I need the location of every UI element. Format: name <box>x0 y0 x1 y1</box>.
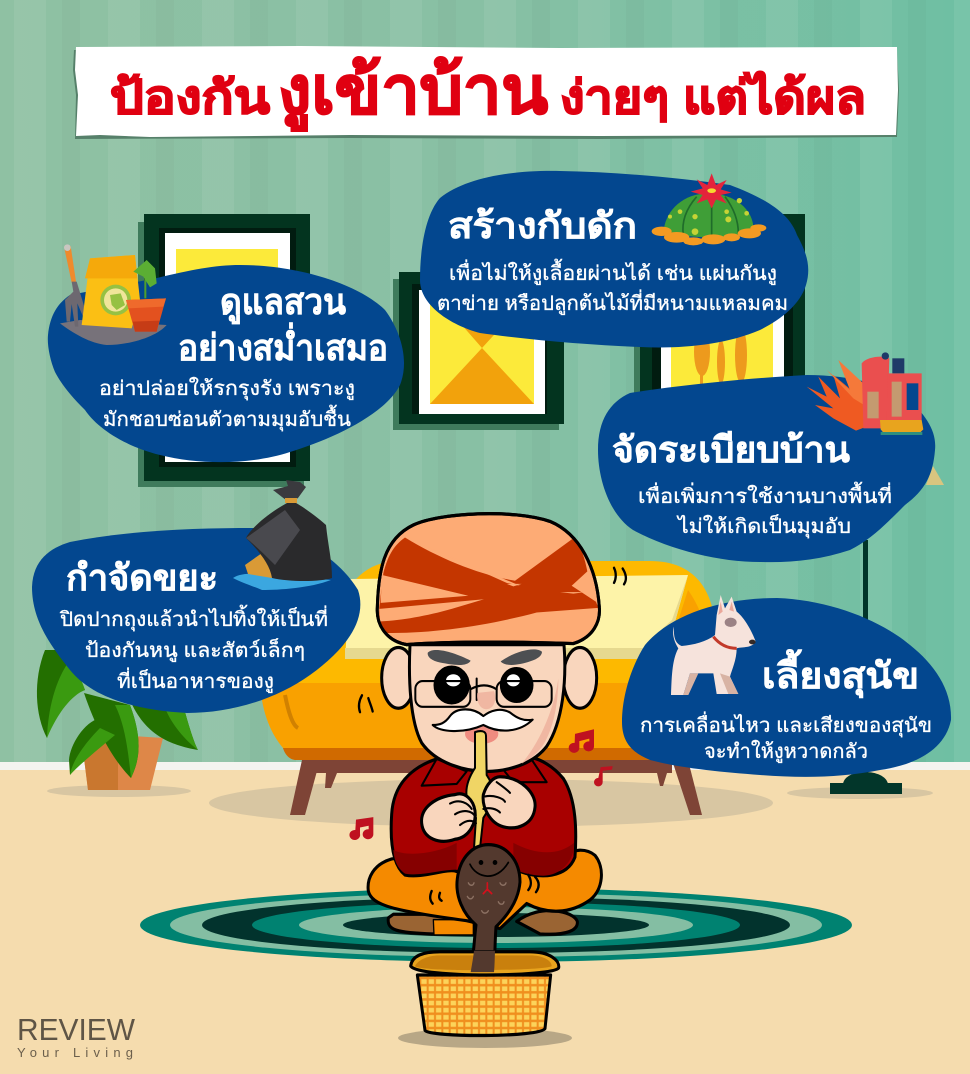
blob: garden <box>48 265 404 462</box>
basket <box>411 951 559 1036</box>
text: tidy house: เพื่อเพิ่มการใช้งานบางพื้นที่ <box>638 482 892 508</box>
snake charmer <box>349 514 626 1036</box>
text: garbage: ป้องกันหนู และสัตว์เล็กๆ <box>85 637 305 663</box>
floor and baseboard <box>0 762 970 1074</box>
eyebrows <box>428 649 542 665</box>
ears <box>382 647 597 708</box>
eyes <box>435 667 532 703</box>
logo: Your Living <box>17 1045 133 1060</box>
picture frame left <box>138 214 310 487</box>
icon: garden tools and plant <box>60 244 167 345</box>
text: trap: สร้างกับดัก <box>448 205 637 246</box>
jacket shading <box>393 843 574 876</box>
icon: cactus <box>652 173 766 245</box>
face <box>409 645 565 771</box>
sofa <box>260 561 716 815</box>
text: garden: ดูแลสวน <box>220 281 346 325</box>
text: garbage <box>60 557 328 694</box>
title text <box>110 53 866 132</box>
music notes <box>349 729 613 840</box>
turban <box>377 514 599 645</box>
red jacket <box>391 757 576 876</box>
mouth <box>465 724 498 744</box>
text: tidy house: จัดระเบียบบ้าน <box>612 429 850 470</box>
icon: garbage bag <box>233 480 332 590</box>
logo: REVIEW <box>17 1012 136 1047</box>
text: dog: เลี้ยงสุนัข <box>762 649 919 699</box>
text: garden <box>99 281 388 432</box>
text: dog: จะทำให้งูหวาดกลัว <box>704 740 868 764</box>
text: dog: การเคลื่อนไหว และเสียงของสุนัข <box>640 711 932 738</box>
text: garbage: ที่เป็นอาหารของงู <box>117 667 274 694</box>
picture frame right <box>634 214 805 402</box>
text: garden: อย่างสม่ำเสมอ <box>178 322 388 368</box>
title text: ง่ายๆ แต่ได้ผล <box>560 71 866 123</box>
cobra snake <box>457 845 520 972</box>
glasses <box>415 679 552 707</box>
shake marks <box>359 568 626 904</box>
text: tidy house: ไม่ให้เกิดเป็นมุมอับ <box>676 513 851 539</box>
text: trap: ตาข่าย หรือปลูกต้นไม้ที่มีหนามแหลมคม <box>437 289 788 316</box>
basket shadow <box>398 1028 572 1048</box>
legs and shoes <box>368 850 601 935</box>
wall background <box>0 0 970 764</box>
floor lamp <box>830 466 944 794</box>
picture frame middle <box>393 272 564 430</box>
blob: garbage <box>32 528 360 713</box>
floor shadows <box>47 779 933 827</box>
title text: งูเข้าบ้าน <box>278 53 548 132</box>
text: tidy house <box>612 429 892 539</box>
blob: tidy house <box>598 375 935 562</box>
title banner <box>73 46 899 139</box>
text: garden: มักชอบซ่อนตัวตามมุมอับชื้น <box>103 405 351 432</box>
blob: dog <box>622 598 951 777</box>
hands and flute <box>422 731 535 848</box>
nose <box>477 691 495 709</box>
potted plant <box>37 650 198 790</box>
cheek shade <box>522 679 558 764</box>
text: dog <box>640 649 932 764</box>
text: trap: เพื่อไม่ให้งูเลื้อยผ่านได้ เช่น แผ่นกันงู <box>449 259 777 286</box>
text: garbage: ปิดปากถุงแล้วนำไปทิ้งให้เป็นที่ <box>60 605 328 632</box>
text: garden: อย่าปล่อยให้รกรุงรัง เพราะงู <box>99 377 355 401</box>
collar <box>422 757 547 786</box>
text: trap <box>437 205 788 316</box>
icon: gloves and cleaners <box>807 352 923 435</box>
text: garbage: กำจัดขยะ <box>66 557 218 598</box>
rug <box>140 888 852 962</box>
icon: dog <box>671 595 756 695</box>
title text: ป้องกัน <box>110 71 271 123</box>
mustache <box>433 709 533 731</box>
blob: trap <box>420 171 808 347</box>
